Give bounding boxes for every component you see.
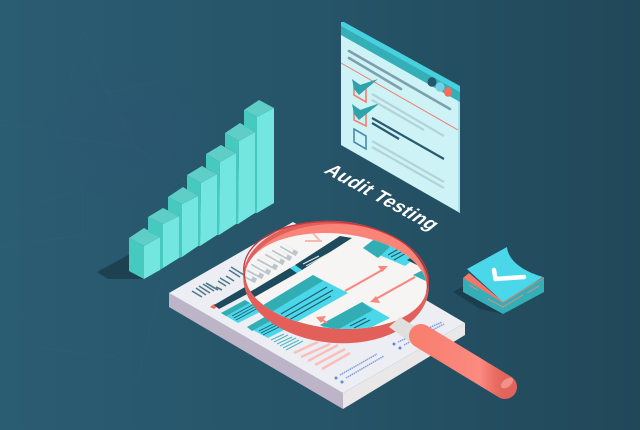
item lines 1	[372, 94, 444, 136]
small cyan block 2	[247, 314, 292, 338]
sticky shadow	[453, 280, 503, 314]
magnified right corner block	[407, 258, 426, 282]
document sheet	[169, 222, 465, 409]
magnified lower block	[320, 302, 390, 329]
magnified cyan block	[263, 275, 348, 322]
bar 3	[168, 187, 198, 258]
window buttons	[428, 77, 452, 97]
background network lines	[0, 30, 185, 382]
magnified top right block	[363, 240, 412, 266]
blue dotted list 2	[392, 322, 444, 350]
small dark strip	[214, 287, 251, 309]
magnified bar chart	[245, 244, 297, 281]
bar chart shadow	[97, 254, 144, 279]
bar 5	[206, 145, 236, 235]
checkbox 3	[354, 129, 366, 149]
magnified pink arrow top	[305, 232, 322, 241]
window top edge	[341, 22, 460, 92]
sticky side stripes	[469, 285, 539, 307]
bar 6	[225, 123, 255, 224]
blue dotted list 1	[334, 354, 384, 384]
magnified dark strip right	[295, 236, 352, 270]
small cyan block 1	[221, 300, 262, 323]
small bar chart	[192, 267, 244, 297]
handle	[421, 336, 505, 387]
handle end highlight	[499, 376, 515, 390]
lens rim red outline	[239, 214, 433, 336]
bar 4	[187, 166, 217, 246]
red divider	[341, 63, 458, 130]
double arrow 1	[345, 266, 388, 291]
view background	[245, 233, 427, 329]
sticky side	[463, 277, 544, 314]
lens top inner band	[245, 224, 426, 283]
paper left side	[169, 293, 343, 409]
bar 2	[148, 208, 179, 270]
paper right side	[343, 323, 465, 409]
sticky top sheet	[467, 247, 543, 302]
magnified dark strip left	[250, 268, 297, 297]
magnifying glass	[238, 213, 515, 390]
window right edge	[458, 88, 460, 213]
paper top	[169, 222, 465, 393]
heading lines	[349, 51, 450, 109]
window page	[341, 22, 460, 213]
magnified cyan marker	[290, 265, 302, 273]
label: Audit Testing: Audit Testing	[319, 161, 444, 234]
background tint	[40, 65, 220, 205]
bar chart	[97, 100, 274, 279]
small red marker	[210, 304, 218, 309]
sticky check mark	[494, 270, 524, 279]
window title bar	[341, 25, 460, 102]
double arrow 2	[370, 277, 415, 303]
sticky pink sheet	[463, 273, 544, 303]
small teal lines	[271, 334, 303, 350]
checklist window	[341, 22, 460, 213]
bar 1	[129, 228, 160, 279]
checkbox 1	[352, 79, 378, 102]
lens magnified view	[245, 233, 427, 329]
small arrow bottom	[316, 316, 327, 323]
sticky note	[453, 247, 544, 314]
checkbox 2	[352, 103, 380, 126]
pink bar chart	[294, 342, 350, 369]
item lines 3	[372, 141, 444, 188]
item lines 2	[372, 118, 444, 159]
handle neck	[389, 317, 422, 343]
bar 7	[244, 100, 274, 213]
lens outer rim	[238, 213, 434, 351]
